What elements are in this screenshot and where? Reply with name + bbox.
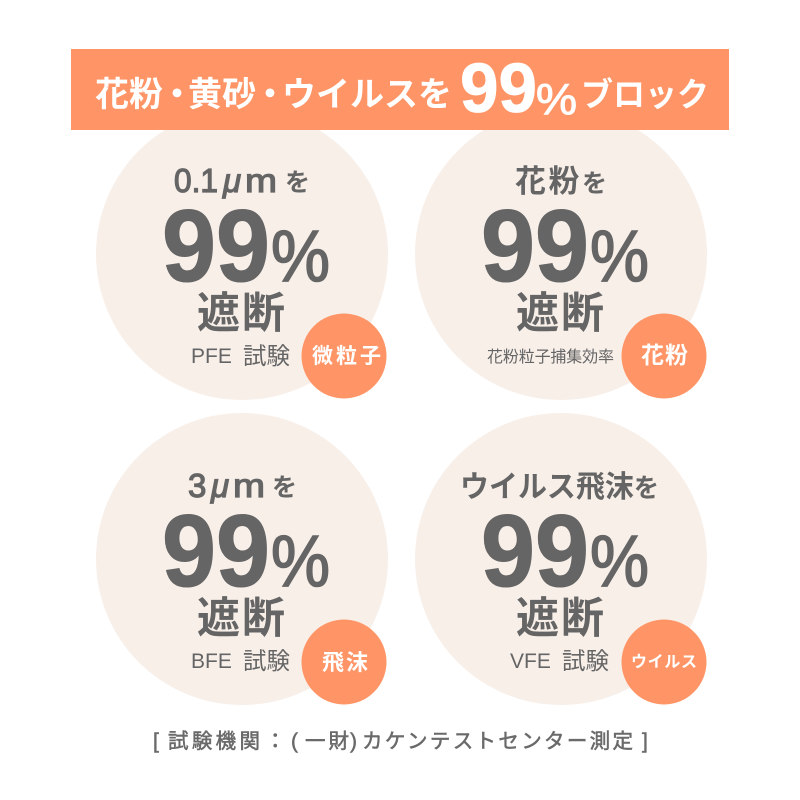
circle background (415, 413, 707, 705)
title: block: ブロック (581, 76, 709, 113)
test name (191, 343, 290, 369)
badge: virus: ウイルス (631, 653, 697, 671)
circle background (96, 413, 388, 705)
badge: virus (622, 620, 706, 704)
test name: 試験 (562, 648, 609, 674)
heading: 0.1μm: m (245, 162, 277, 199)
footnote: testing agency: カケンテストセンター測定 (362, 730, 633, 753)
panel: 3 micron droplets (96, 413, 388, 705)
test name: 試験 (243, 648, 290, 674)
circle background (415, 108, 707, 400)
footnote: testing agency: ( (291, 730, 298, 753)
heading: 3μm: m (233, 467, 265, 504)
label: block: 遮断 (516, 595, 604, 643)
label: block: 遮断 (516, 290, 604, 338)
badge: droplets: 飛沫 (322, 650, 368, 675)
title: lead text: ・ (160, 76, 194, 114)
badge: pollen (622, 314, 706, 398)
footnote: testing agency: ： (265, 730, 286, 753)
stat: 99: 99 (481, 494, 589, 608)
title: lead text: ウイルスを (282, 76, 452, 114)
badge: fine particles (302, 314, 386, 398)
heading: 0.1μm (174, 162, 310, 199)
stat: percent: % (271, 522, 330, 602)
title: lead text (95, 76, 452, 114)
stat: 99: 99 (162, 189, 270, 303)
test name: PFE (191, 345, 232, 368)
label: block: 遮断 (197, 290, 285, 338)
stat: 99: 99 (162, 494, 270, 608)
title banner (71, 49, 729, 130)
heading: 0.1μm: μ (222, 162, 241, 199)
footnote: testing agency: ) (350, 730, 357, 753)
heading: 0.1μm: を (285, 169, 310, 197)
test name (191, 648, 290, 674)
title: 99: 99 (460, 49, 537, 127)
stat: percent: % (271, 217, 330, 297)
circle background (96, 108, 388, 400)
test name: 試験 (243, 343, 290, 369)
heading: 3μm (188, 467, 297, 504)
heading: 3μm: 3 (188, 467, 206, 504)
badge: pollen: 花粉 (641, 342, 688, 368)
panel: pollen (415, 108, 707, 400)
test name (510, 648, 609, 674)
panel: virus droplets (415, 413, 707, 705)
heading: pollen: 花粉を (515, 164, 607, 199)
footnote: testing agency: 試験機関 (168, 730, 260, 753)
heading: 3μm: を (272, 474, 297, 502)
title: percent: % (536, 75, 577, 124)
test name: BFE (191, 650, 232, 673)
panel: 0.1 micron particles (96, 108, 388, 400)
footnote: testing agency: [ (153, 730, 159, 753)
badge: fine particles: 微粒子 (312, 345, 381, 368)
heading: virus droplets: ウイルス飛沫を (460, 471, 659, 504)
footnote: testing agency (153, 730, 648, 753)
stat: percent: % (590, 522, 649, 602)
footnote: testing agency: ] (642, 730, 648, 753)
title: lead text: 黄砂 (188, 76, 256, 114)
footnote: testing agency: 一財 (305, 730, 349, 753)
badge: droplets (302, 620, 386, 704)
stat: 99: 99 (481, 189, 589, 303)
test name: 花粉粒子捕集効率 (487, 348, 614, 366)
title: lead text: ・ (253, 76, 287, 114)
heading: 0.1μm: 0.1 (174, 162, 218, 199)
label: block: 遮断 (197, 595, 285, 643)
title: lead text: 花粉 (95, 76, 163, 114)
stat: percent: % (590, 217, 649, 297)
test name: VFE (510, 650, 551, 673)
heading: 3μm: μ (210, 467, 229, 504)
